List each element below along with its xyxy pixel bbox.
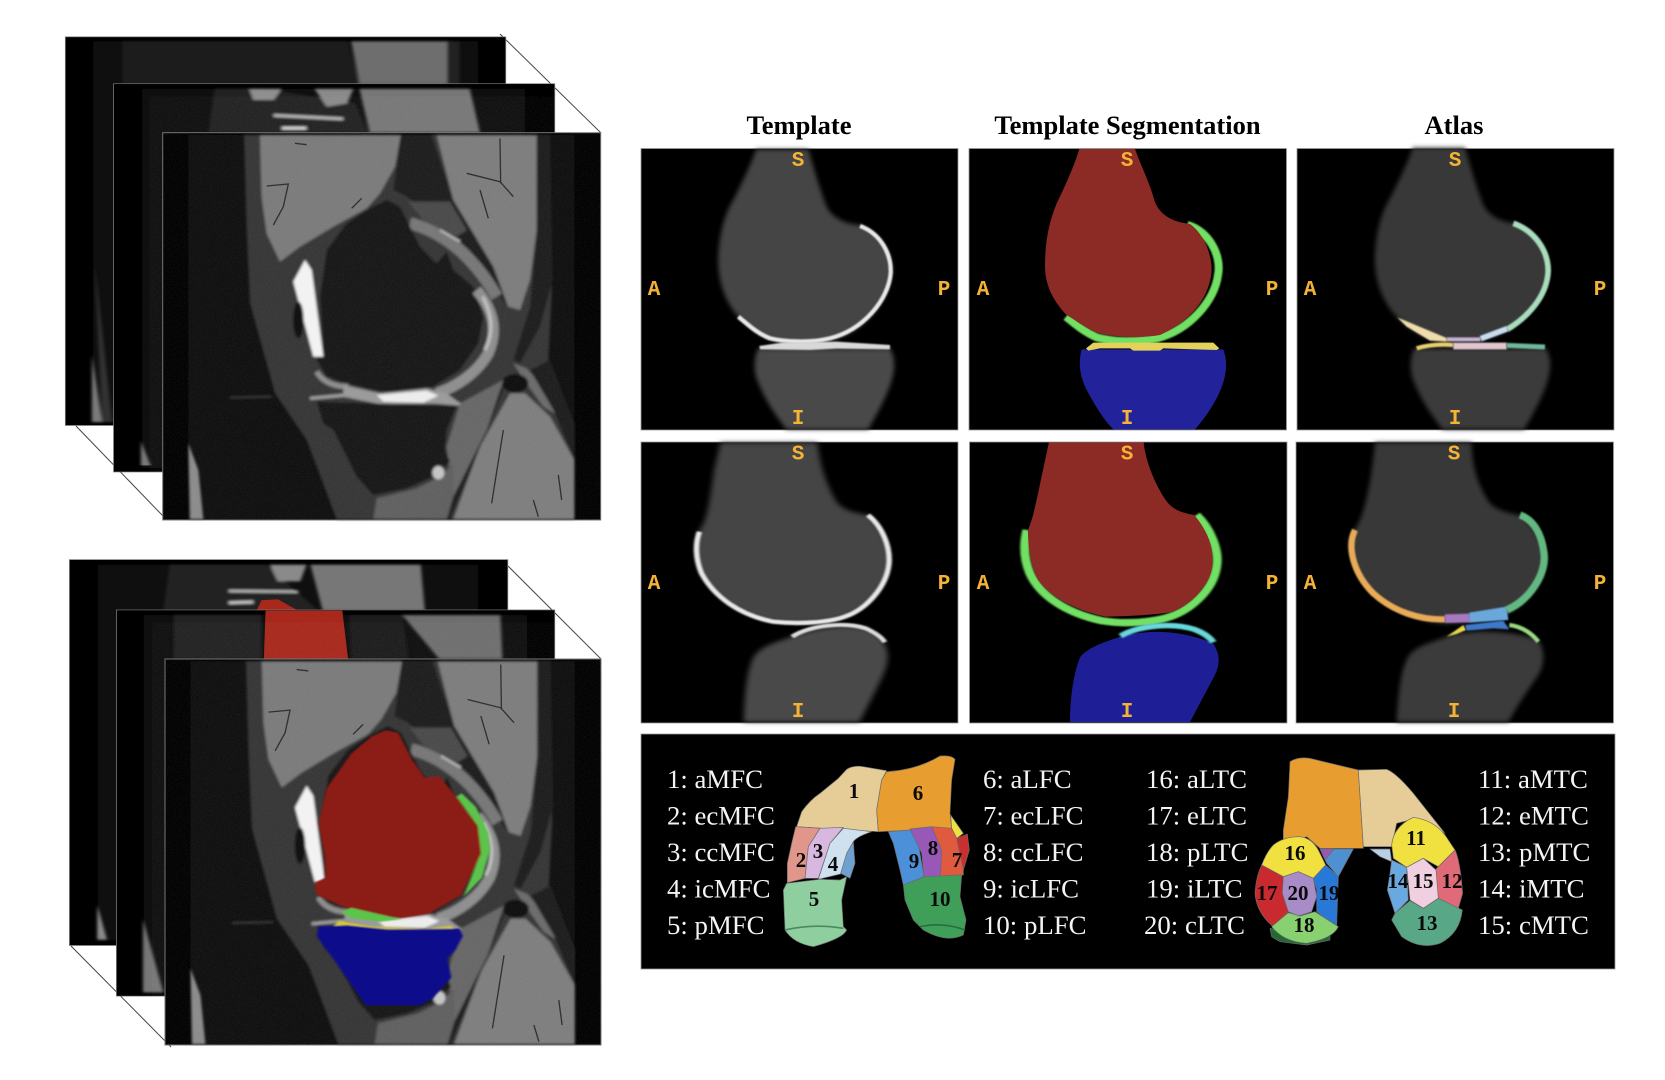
orientation labels: A xyxy=(1304,279,1317,302)
heading: Template Segmentation: Template Segmentation xyxy=(994,110,1261,140)
orientation labels: I xyxy=(792,408,804,431)
legend: medial tibial labels: 11: aMTC xyxy=(1478,764,1588,794)
tibial cartilage xyxy=(1121,626,1213,642)
femur xyxy=(1349,442,1546,623)
orientation labels: I xyxy=(792,701,804,724)
region numbers: tibia: 18 xyxy=(1294,913,1314,937)
region numbers: tibia: 15 xyxy=(1412,869,1434,893)
orientation labels xyxy=(1304,150,1606,431)
tibia xyxy=(317,925,463,1022)
MRI frame: segmented back slice xyxy=(69,560,508,945)
legend: medial tibial labels: 14: iMTC xyxy=(1478,874,1584,904)
heading: Template: Template xyxy=(746,110,852,140)
femur xyxy=(315,730,481,918)
tibia xyxy=(1080,349,1226,429)
posterior cartilage xyxy=(1507,515,1544,610)
segmentation overlays xyxy=(315,730,490,1022)
orientation labels: I xyxy=(1449,408,1461,431)
region numbers: femur: 5 xyxy=(809,887,819,911)
legend: lateral femoral labels: 9: icLFC xyxy=(983,874,1079,904)
orientation labels xyxy=(1304,444,1606,724)
connector: back to front, top right xyxy=(500,34,601,133)
MRI frame: back slice xyxy=(65,37,506,425)
tibial cartilage xyxy=(334,921,454,930)
MRI frame: middle slice xyxy=(114,84,555,472)
orientation labels: I xyxy=(1448,701,1460,724)
posterior cartilage xyxy=(1507,223,1548,329)
orientation labels xyxy=(977,444,1278,724)
segmentation: femur, back slice xyxy=(257,599,298,611)
legend: medial femoral labels: 3: ccMFC xyxy=(667,837,775,867)
region numbers: femur: 7 xyxy=(952,848,962,872)
legend: lateral femoral labels: 8: ccLFC xyxy=(983,837,1083,867)
region numbers: tibia xyxy=(1256,826,1462,937)
tibia xyxy=(1397,631,1543,722)
region numbers: femur: 9 xyxy=(909,849,919,873)
connector: back to front, bottom left xyxy=(76,426,163,516)
legend: medial tibial labels: 13: pMTC xyxy=(1478,837,1590,867)
legend: medial tibial labels xyxy=(1478,764,1590,940)
femoral cartilage xyxy=(1025,515,1217,623)
panel: atlas, lower slice xyxy=(1296,442,1614,724)
orientation labels: S xyxy=(1121,444,1133,466)
legend: lateral tibial labels: 19: iLTC xyxy=(1146,874,1243,904)
orientation labels: P xyxy=(938,279,950,302)
legend: medial femoral labels xyxy=(667,764,775,940)
tibia surface map xyxy=(1255,758,1463,946)
tibia xyxy=(744,626,888,722)
region numbers: femur: 2 xyxy=(796,848,806,872)
connector: segmented bottom left xyxy=(71,946,171,1047)
orientation labels: P xyxy=(1266,573,1278,596)
region numbers: tibia: 14 xyxy=(1388,869,1409,893)
femur xyxy=(697,442,889,623)
orientation labels: I xyxy=(1121,701,1133,724)
tibia xyxy=(1411,348,1550,429)
tibial cartilage xyxy=(1417,345,1453,348)
orientation labels: A xyxy=(648,279,661,302)
panel: template, upper slice xyxy=(641,148,958,431)
MRI frame: segmented front slice xyxy=(165,659,601,1045)
legend: lateral tibial labels: 18: pLTC xyxy=(1146,837,1248,867)
tibial cartilage xyxy=(1447,625,1466,637)
orientation labels: I xyxy=(1121,408,1133,431)
anterior cartilage xyxy=(1351,530,1445,619)
femoral cartilage distal xyxy=(341,908,402,922)
central cartilage xyxy=(1481,329,1507,339)
orientation labels: S xyxy=(1121,150,1133,173)
MRI frame: front slice xyxy=(163,133,601,520)
panel: atlas, upper slice xyxy=(1297,148,1614,431)
region numbers: tibia: 11 xyxy=(1406,826,1426,850)
femur surface map xyxy=(783,756,969,947)
region numbers: tibia: 13 xyxy=(1416,911,1438,935)
legend: lateral femoral labels: 6: aLFC xyxy=(983,764,1072,794)
orientation labels: A xyxy=(1304,573,1317,596)
orientation labels xyxy=(648,150,950,431)
region numbers: femur: 3 xyxy=(813,839,823,863)
legend: medial tibial labels: 15: cMTC xyxy=(1478,910,1589,940)
orientation labels: P xyxy=(1594,573,1606,596)
panel: cartilage subregion legend xyxy=(641,734,1615,969)
region numbers: femur xyxy=(796,779,962,911)
region numbers: femur: 8 xyxy=(928,836,938,860)
legend: lateral femoral labels xyxy=(983,764,1086,940)
orientation labels: A xyxy=(977,279,990,302)
legend: medial femoral labels: 5: pMFC xyxy=(667,910,765,940)
connector: segmented top right xyxy=(508,566,601,659)
orientation labels: P xyxy=(1594,279,1606,302)
legend: medial femoral labels: 4: icMFC xyxy=(667,874,770,904)
legend: medial tibial labels: 12: eMTC xyxy=(1478,800,1589,830)
region numbers: femur: 6 xyxy=(913,781,923,805)
tibia xyxy=(1070,632,1219,722)
femoral cartilage xyxy=(697,515,889,623)
orientation labels: S xyxy=(792,444,804,466)
femur xyxy=(718,149,892,343)
legend: lateral tibial labels: 17: eLTC xyxy=(1146,800,1247,830)
orientation labels xyxy=(977,150,1278,431)
MRI frame: segmented middle slice xyxy=(116,610,555,996)
legend: medial femoral labels: 1: aMFC xyxy=(667,764,763,794)
tibial cartilage xyxy=(759,342,890,350)
orientation labels: P xyxy=(1266,279,1278,302)
panel: template segmentation, lower slice xyxy=(970,442,1287,724)
femoral cartilage posterior xyxy=(457,793,490,897)
tibia xyxy=(755,348,894,429)
orientation labels xyxy=(648,444,950,724)
femur xyxy=(1028,442,1213,617)
region numbers: tibia: 16 xyxy=(1284,841,1306,865)
legend: lateral femoral labels: 7: ecLFC xyxy=(983,800,1083,830)
orientation labels: S xyxy=(792,150,804,173)
legend: lateral tibial labels: 20: cLTC xyxy=(1144,910,1245,940)
MRI stack: original scans xyxy=(65,34,601,520)
femoral cartilage xyxy=(738,226,891,341)
orientation labels: A xyxy=(977,573,990,596)
region numbers: tibia: 20 xyxy=(1288,881,1308,905)
femoral cartilage xyxy=(1066,225,1219,341)
region numbers: tibia: 19 xyxy=(1318,881,1340,905)
panel: template segmentation, upper slice xyxy=(969,148,1286,431)
legend: lateral femoral labels: 10: pLFC xyxy=(983,910,1086,940)
heading: Atlas: Atlas xyxy=(1425,110,1483,140)
region numbers: femur: 1 xyxy=(849,779,859,803)
region numbers: tibia: 17 xyxy=(1256,881,1278,905)
MRI stack: segmented scans xyxy=(69,560,601,1047)
orientation labels: S xyxy=(1448,444,1460,466)
femur xyxy=(1375,148,1548,341)
tibial cartilage xyxy=(1086,343,1219,351)
anterior cartilage xyxy=(1397,317,1447,342)
orientation labels: P xyxy=(938,573,950,596)
central cartilage xyxy=(1445,605,1470,632)
legend: lateral tibial labels xyxy=(1144,764,1248,940)
orientation labels: A xyxy=(648,573,661,596)
segmentation: femur, middle slice xyxy=(264,611,348,659)
femur xyxy=(1045,149,1212,337)
panel: template, lower slice xyxy=(641,442,958,724)
region numbers: tibia: 12 xyxy=(1442,869,1462,893)
tibial cartilage xyxy=(792,625,885,642)
legend: medial femoral labels: 2: ecMFC xyxy=(667,800,775,830)
region numbers: femur: 4 xyxy=(828,852,839,876)
region numbers: femur: 10 xyxy=(930,887,950,911)
orientation labels: S xyxy=(1449,150,1461,173)
legend: lateral tibial labels: 16: aLTC xyxy=(1146,764,1247,794)
